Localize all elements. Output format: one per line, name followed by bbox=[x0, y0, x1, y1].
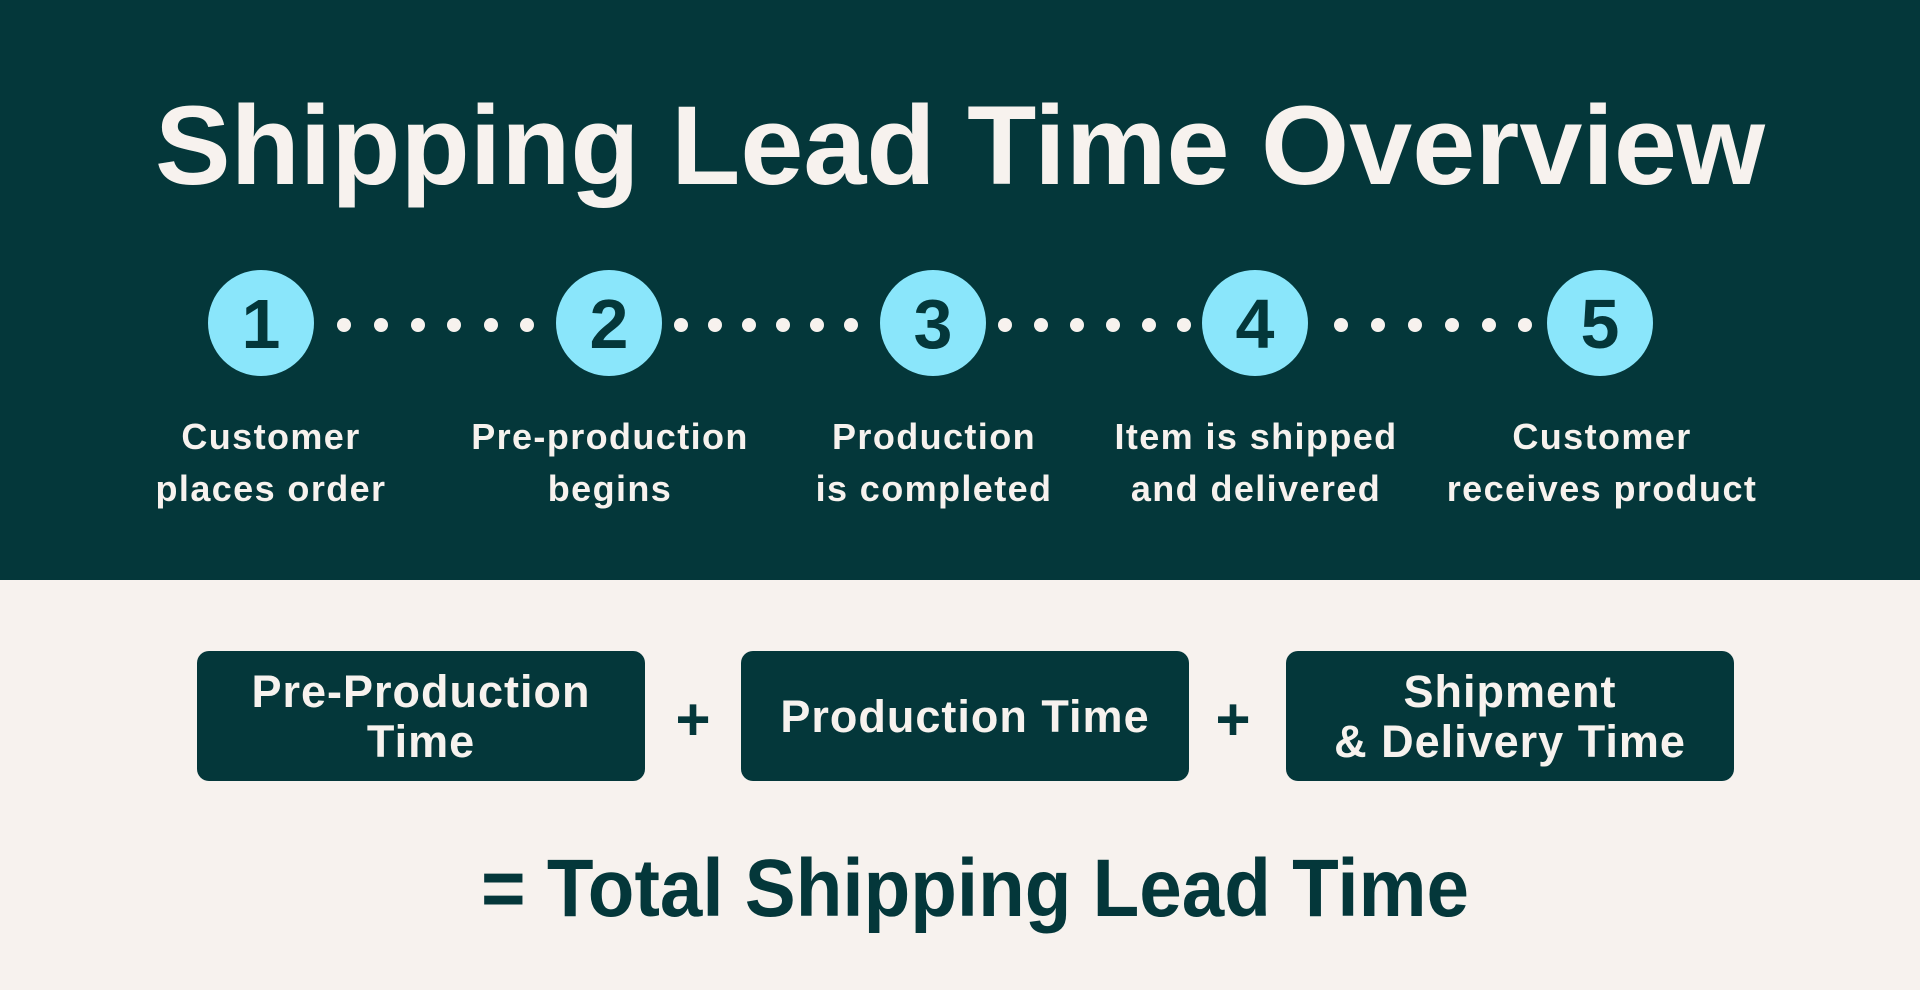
step 5: 5 bbox=[1581, 285, 1619, 363]
step 2: begins bbox=[548, 468, 672, 509]
box: pre-production time bbox=[197, 651, 645, 781]
step 1: 1 bbox=[242, 285, 280, 363]
title: Shipping Lead Time Overview bbox=[155, 83, 1766, 208]
box: shipment & delivery time: Shipment bbox=[1403, 666, 1617, 717]
box: production time bbox=[741, 651, 1189, 781]
step 4: 4 bbox=[1236, 285, 1275, 363]
step 4: and delivered bbox=[1131, 468, 1381, 509]
step 1: places order bbox=[156, 468, 386, 509]
timeline bbox=[156, 270, 1757, 509]
step 3: is completed bbox=[816, 468, 1052, 509]
step 3: Production bbox=[832, 416, 1036, 457]
box: production time: Production Time bbox=[780, 691, 1150, 742]
step 2: Pre-production bbox=[471, 416, 749, 457]
step 5: receives product bbox=[1447, 468, 1757, 509]
step 2: 2 bbox=[590, 285, 628, 363]
step 2 bbox=[471, 270, 749, 509]
step 5: Customer bbox=[1512, 416, 1692, 457]
box: pre-production time: Time bbox=[367, 716, 475, 767]
step 4 bbox=[1114, 270, 1398, 509]
step 4: Item is shipped bbox=[1114, 416, 1398, 457]
step 3 bbox=[816, 270, 1052, 509]
box: shipment & delivery time bbox=[1286, 651, 1734, 781]
step 5 bbox=[1447, 270, 1757, 509]
plus: + bbox=[675, 686, 711, 753]
step 3: 3 bbox=[914, 285, 952, 363]
dotted connectors bbox=[337, 318, 1532, 332]
plus: + bbox=[1215, 686, 1251, 753]
step 1: Customer bbox=[181, 416, 361, 457]
box: shipment & delivery time: & Delivery Time bbox=[1334, 716, 1686, 767]
box: pre-production time: Pre-Production bbox=[251, 666, 591, 717]
total line: = Total Shipping Lead Time bbox=[481, 843, 1469, 934]
step 1 bbox=[156, 270, 386, 509]
